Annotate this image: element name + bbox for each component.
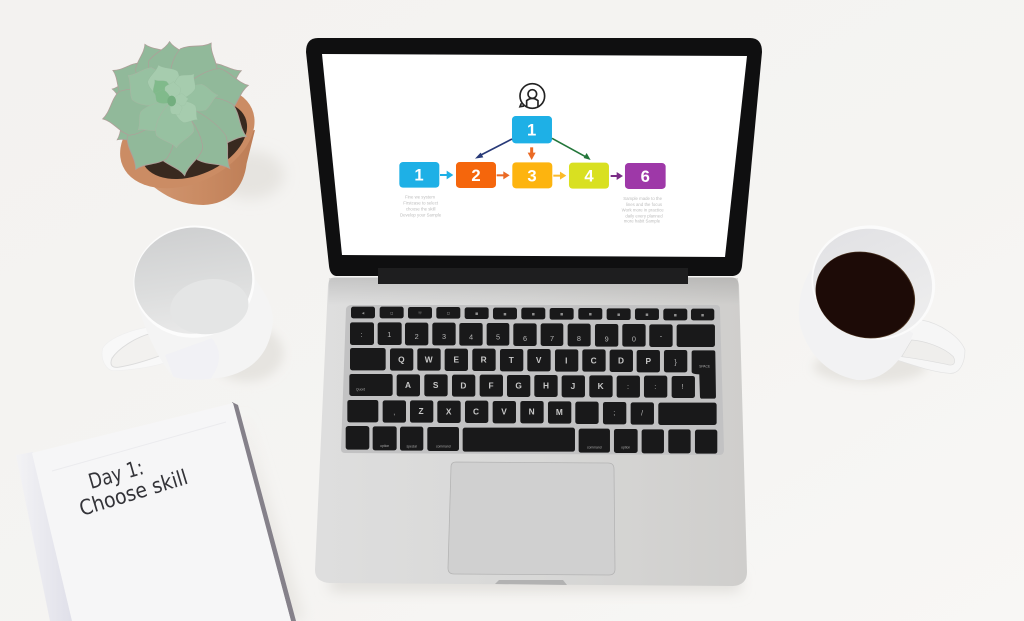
trackpad <box>448 462 615 575</box>
QWERTY row: } <box>674 357 677 366</box>
number row: : <box>361 330 363 339</box>
bottom letter row: ; <box>613 408 615 417</box>
laptop base <box>315 277 747 586</box>
QWERTY row: T <box>509 355 514 365</box>
left caption: Develop your Sample <box>400 213 442 218</box>
home row: K <box>598 381 604 391</box>
QWERTY row: P <box>646 356 652 366</box>
home row: Quord <box>356 387 365 391</box>
mug body <box>135 277 273 380</box>
function row: ▪ <box>701 312 704 318</box>
QWERTY row: E <box>454 355 460 365</box>
step 4 box: 4 <box>584 167 594 186</box>
QWERTY row: W <box>425 354 433 364</box>
bottom letter row: V <box>501 407 507 417</box>
notebook page <box>32 403 291 621</box>
right caption: Work more in practice <box>622 208 664 213</box>
hinge <box>378 268 688 284</box>
step 3 box: 3 <box>527 166 537 185</box>
modifier row: special <box>406 444 417 448</box>
bottom letter row <box>347 400 717 425</box>
bottom letter row: M <box>556 407 563 417</box>
modifier row: option <box>380 444 389 448</box>
QWERTY row <box>350 348 716 399</box>
terracotta pot <box>104 67 271 208</box>
notebook <box>16 402 305 621</box>
function row: ▫ <box>447 311 450 317</box>
step 2 box: 2 <box>471 166 481 185</box>
home row: S <box>433 380 439 390</box>
home row: : <box>654 382 656 391</box>
step 1 box: 1 <box>414 166 424 185</box>
bottom letter row: / <box>641 409 644 418</box>
QWERTY row: SPACE <box>699 364 711 368</box>
function row: ▫ <box>390 310 393 316</box>
modifier row: option <box>621 445 630 449</box>
home row: ! <box>682 382 684 391</box>
function row: ▪ <box>475 311 478 317</box>
right caption <box>622 196 664 224</box>
function row: ▪ <box>532 311 535 317</box>
cup body <box>799 270 913 380</box>
left caption: Fine we system <box>405 195 435 200</box>
number row <box>350 322 715 347</box>
coffee <box>803 238 927 352</box>
step 1 top box <box>512 116 552 143</box>
home row: D <box>460 380 466 390</box>
user icon <box>520 84 545 108</box>
number row: 2 <box>415 332 419 341</box>
laptop lid <box>306 38 762 276</box>
number row: - <box>660 331 663 340</box>
home row: F <box>488 380 494 390</box>
number row: 4 <box>469 333 473 342</box>
keyboard <box>346 307 717 454</box>
step 6 box: 6 <box>641 167 650 186</box>
opening notch <box>495 580 567 585</box>
home row: A <box>405 380 411 390</box>
home row: : <box>627 382 629 391</box>
mug handle <box>102 327 173 371</box>
QWERTY row: V <box>536 355 542 365</box>
connector arrows from top box <box>475 138 591 160</box>
bottom letter row: C <box>473 406 479 416</box>
home row: G <box>515 381 522 391</box>
QWERTY row: R <box>481 355 487 365</box>
number row: 3 <box>442 332 446 341</box>
QWERTY row: I <box>565 355 567 365</box>
modifier row: command <box>436 444 451 448</box>
number row: 1 <box>387 330 391 339</box>
step 6 box <box>625 163 666 189</box>
keyboard well <box>341 305 724 455</box>
left caption: Firstcase to select <box>403 201 439 206</box>
right caption: daily every planned <box>625 213 663 218</box>
number row: 9 <box>605 335 609 344</box>
handwritten note: Day 1: <box>86 455 146 494</box>
QWERTY row: C <box>591 355 597 365</box>
step 4 box <box>569 163 609 189</box>
right caption: more habit Sample <box>624 219 661 224</box>
bottom letter row: , <box>393 407 395 416</box>
function row: ▪ <box>503 311 507 317</box>
arrow 3 to 4 <box>553 172 566 180</box>
function row: ☼ <box>418 311 422 317</box>
number row: 7 <box>550 334 554 343</box>
step 2 box <box>456 162 496 188</box>
screen <box>322 54 747 257</box>
bottom letter row: X <box>446 406 452 416</box>
step 1 top box: 1 <box>527 121 536 140</box>
arrow 2 to 3 <box>497 171 510 179</box>
left caption <box>400 195 442 218</box>
function row: ▪ <box>645 312 649 318</box>
function row: ▪ <box>589 312 592 318</box>
plant <box>97 30 284 208</box>
notebook edge <box>232 402 296 621</box>
handwritten note: Choose skill <box>76 465 191 521</box>
function row <box>351 307 714 320</box>
left caption: choose the skill <box>406 207 435 212</box>
QWERTY row: Q <box>398 354 405 364</box>
arrow 1 to 2 <box>440 171 453 179</box>
coffee cup <box>797 210 965 383</box>
right caption: lines and the focus <box>626 202 662 207</box>
home row: H <box>543 381 549 391</box>
step 3 box <box>512 162 552 188</box>
function row: ◂ <box>362 310 365 316</box>
succulent rosette <box>97 30 256 181</box>
modifier row: command <box>587 445 602 449</box>
cup rim <box>797 210 950 356</box>
number row: 5 <box>496 333 500 342</box>
cup handle <box>897 320 965 373</box>
step 1 box <box>399 162 439 188</box>
laptop <box>306 38 762 591</box>
bottom letter row: N <box>529 407 535 417</box>
function row: ▪ <box>617 312 620 318</box>
number row: 6 <box>523 334 527 343</box>
bottom letter row: Z <box>418 406 424 416</box>
function row: ▪ <box>674 312 677 318</box>
right caption: Sample made to the <box>623 196 663 201</box>
mug rim and interior <box>126 218 262 346</box>
home row: J <box>571 381 576 391</box>
notebook spine <box>16 452 74 621</box>
number row: 0 <box>632 335 636 344</box>
QWERTY row: D <box>618 356 624 366</box>
arrow 4 to 6 <box>611 172 623 180</box>
function row: ▪ <box>560 312 563 318</box>
modifier row <box>346 426 717 454</box>
empty white mug <box>102 218 283 382</box>
number row: 8 <box>577 334 581 343</box>
home row <box>349 374 695 398</box>
flow diagram on screen <box>399 84 666 224</box>
